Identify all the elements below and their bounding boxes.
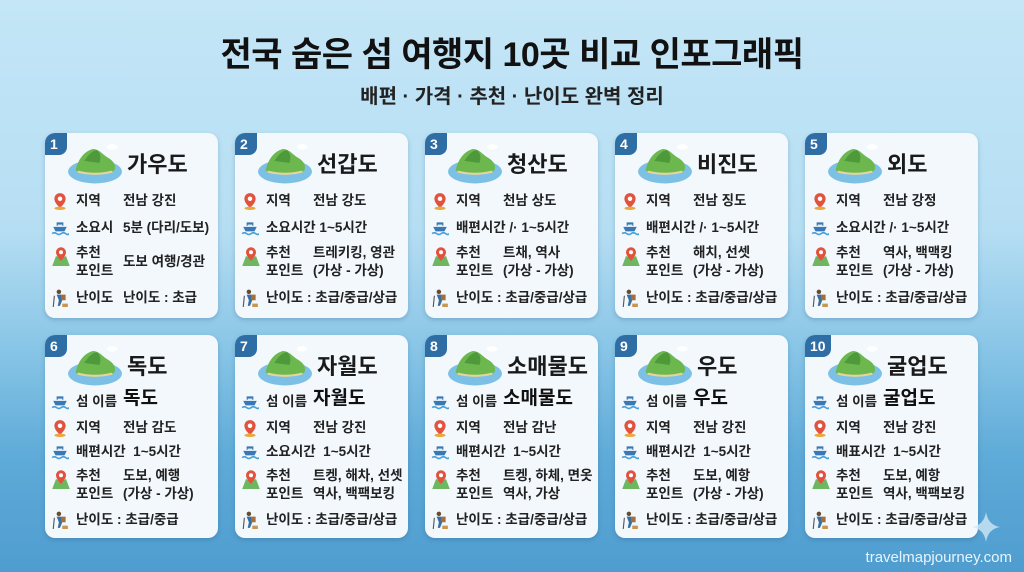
card 1: 가우도: 전남 강진 [123,193,176,208]
card 2: 선갑도: 지역 [266,193,291,208]
card 7: 자월도: 자월도 [313,388,365,409]
card 5: 외도: 외도 [887,152,927,177]
card 9: 우도: 난이도 : 초급/중급/상급 [646,512,777,527]
card 1: 가우도: 포인트 [76,263,113,278]
card 9: 우도: 포인트 [646,486,683,501]
card 5: 외도: 역사, 백맥킹 [883,245,953,260]
card 7: 자월도: 트켕, 해차, 선셋 [313,468,403,483]
card 8: 소매물도: 소매물도 [503,388,573,409]
card 6: 독도: 추천 [76,468,101,483]
card 6: 독도: (가상 - 가상) [123,486,194,501]
card 4: 비진도: 전남 징도 [693,193,746,208]
card 10: 굴업도: 추천 [836,468,861,483]
card 8: 소매물도: 역사, 가상 [503,486,560,501]
card 3: 청산도: 배편시간 /· 1~5시간 [456,220,569,235]
card 6: 독도: 배편시간 1~5시간 [76,444,181,459]
card 1: 가우도: 난이도 : 초급 [123,290,197,305]
card 10: 굴업도: 지역 [836,420,861,435]
card 7: 자월도: 소요시간 1~5시간 [266,444,371,459]
card 8: 소매물도: 소매물도 [507,354,588,379]
card 4: 비진도: 배편시간 /· 1~5시간 [646,220,759,235]
card 3: 청산도: 지역 [456,193,481,208]
card 6: 독도: 전남 감도 [123,420,176,435]
card 9: 우도: 추천 [646,468,671,483]
card 5: 외도: 추천 [836,245,861,260]
card 10: 굴업도: 도보, 예항 [883,468,940,483]
title: 전국 숨은 섬 여행지 10곳 비교 인포그래픽 [220,36,803,74]
card 2: 선갑도: 트레키킹, 영관 [313,245,395,260]
card 3: 청산도 [425,133,598,318]
card 9: 우도: (가상 - 가상) [693,486,764,501]
card 4: 비진도: 추천 [646,245,671,260]
card 7: 자월도: 역사, 백팩보킹 [313,486,395,501]
card 4: 비진도: (가상 - 가상) [693,263,764,278]
card 9: 우도: 배편시간 1~5시간 [646,444,751,459]
card 9: 우도: 우도 [697,354,737,379]
card 4: 비진도: 난이도 : 초급/중급/상급 [646,290,777,305]
card 2: 선갑도: 추천 [266,245,291,260]
card 8: 소매물도: 지역 [456,420,481,435]
card 5: 외도: 지역 [836,193,861,208]
card 6: 독도: 난이도 : 초급/중급 [76,512,179,527]
card 1: 가우도 [45,133,218,318]
card 5: 외도 [805,133,978,318]
card 3: 청산도: 포인트 [456,263,493,278]
card 6: 독도: 도보, 예행 [123,468,180,483]
card 6: 독도: 독도 [127,354,167,379]
card 8: 소매물도: 전남 감난 [503,420,556,435]
card 1: 가우도: 지역 [76,193,101,208]
icon: sparkle [972,512,1000,542]
card 8: 소매물도: 섬 이름 [456,394,497,409]
card 10: 굴업도: 섬 이름 [836,394,877,409]
card 4: 비진도: 4 [620,136,628,152]
card 4: 비진도: 포인트 [646,263,683,278]
card 10: 굴업도: 배표시간 1~5시간 [836,444,941,459]
card 2: 선갑도: 선갑도 [317,152,378,177]
card 10: 굴업도: 포인트 [836,486,873,501]
footer url: travelmapjourney.com [866,549,1012,566]
card 9: 우도 [615,335,788,538]
card 10: 굴업도: 역사, 백팩보킹 [883,486,965,501]
subtitle: 배편 · 가격 · 추천 · 난이도 완벽 정리 [360,86,664,108]
card 8: 소매물도: 난이도 : 초급/중급/상급 [456,512,587,527]
card 10: 굴업도: 굴업도 [883,388,935,409]
card 10: 굴업도 [805,335,978,538]
card 4: 비진도 [615,133,788,318]
card 7: 자월도: 지역 [266,420,291,435]
card 7: 자월도: 자월도 [317,354,378,379]
card 2: 선갑도: 전남 강도 [313,193,366,208]
card 8: 소매물도: 8 [430,338,438,354]
card 9: 우도: 우도 [693,388,728,409]
card 2: 선갑도: 소요시간 1~5시간 [266,220,367,235]
card 8: 소매물도: 트켕, 하체, 면옷 [503,468,593,483]
card 6: 독도: 지역 [76,420,101,435]
card 8: 소매물도 [425,335,598,538]
card 4: 비진도: 비진도 [697,152,758,177]
card 5: 외도: 5 [810,136,818,152]
card 4: 비진도: 지역 [646,193,671,208]
card 10: 굴업도: 10 [810,338,826,354]
card 9: 우도: 전남 강진 [693,420,746,435]
card 6: 독도: 섬 이름 [76,394,117,409]
card 7: 자월도: 섬 이름 [266,394,307,409]
card 5: 외도: 전남 강정 [883,193,936,208]
card 10: 굴업도: 난이도 : 초급/중급/상급 [836,512,967,527]
card 2: 선갑도: 포인트 [266,263,303,278]
card 8: 소매물도: 포인트 [456,486,493,501]
card 9: 우도: 9 [620,338,628,354]
card 1: 가우도: 1 [50,136,58,152]
card 7: 자월도 [235,335,408,538]
card 3: 청산도: 추천 [456,245,481,260]
card 1: 가우도: 추천 [76,245,101,260]
card 10: 굴업도: 전남 강진 [883,420,936,435]
card 2: 선갑도 [235,133,408,318]
card 5: 외도: 포인트 [836,263,873,278]
card 6: 독도: 포인트 [76,486,113,501]
card 6: 독도 [45,335,218,538]
card 3: 청산도: 난이도 : 초급/중급/상급 [456,290,587,305]
card 10: 굴업도: 굴업도 [887,354,948,379]
card 3: 청산도: 청산도 [507,152,568,177]
card 1: 가우도: 소요시 [76,220,113,235]
card 3: 청산도: 천남 상도 [503,193,556,208]
card 9: 우도: 섬 이름 [646,394,687,409]
card 9: 우도: 지역 [646,420,671,435]
card 7: 자월도: 포인트 [266,486,303,501]
card 1: 가우도: 도보 여행/경관 [123,254,205,269]
card 2: 선갑도: 2 [240,136,248,152]
card 9: 우도: 도보, 예항 [693,468,750,483]
card 8: 소매물도: 추천 [456,468,481,483]
card 1: 가우도: 난이도 [76,290,113,305]
card 2: 선갑도: (가상 - 가상) [313,263,384,278]
card 3: 청산도: 트채, 역사 [503,245,560,260]
card 8: 소매물도: 배편시간 1~5시간 [456,444,561,459]
card 7: 자월도: 추천 [266,468,291,483]
card 2: 선갑도: 난이도 : 초급/중급/상급 [266,290,397,305]
card 7: 자월도: 7 [240,338,248,354]
card 5: 외도: 난이도 : 초급/중급/상급 [836,290,967,305]
card 7: 자월도: 난이도 : 초급/중급/상급 [266,512,397,527]
card 4: 비진도: 해치, 선셋 [693,245,750,260]
card 3: 청산도: 3 [430,136,438,152]
card 3: 청산도: (가상 - 가상) [503,263,574,278]
card 6: 독도: 독도 [123,388,158,409]
card 5: 외도: 소요시간 /· 1~5시간 [836,220,949,235]
card 5: 외도: (가상 - 가상) [883,263,954,278]
card 7: 자월도: 전남 강진 [313,420,366,435]
card 6: 독도: 6 [50,338,58,354]
card 1: 가우도: 가우도 [127,152,188,177]
card 1: 가우도: 5분 (다리/도보) [123,220,209,235]
